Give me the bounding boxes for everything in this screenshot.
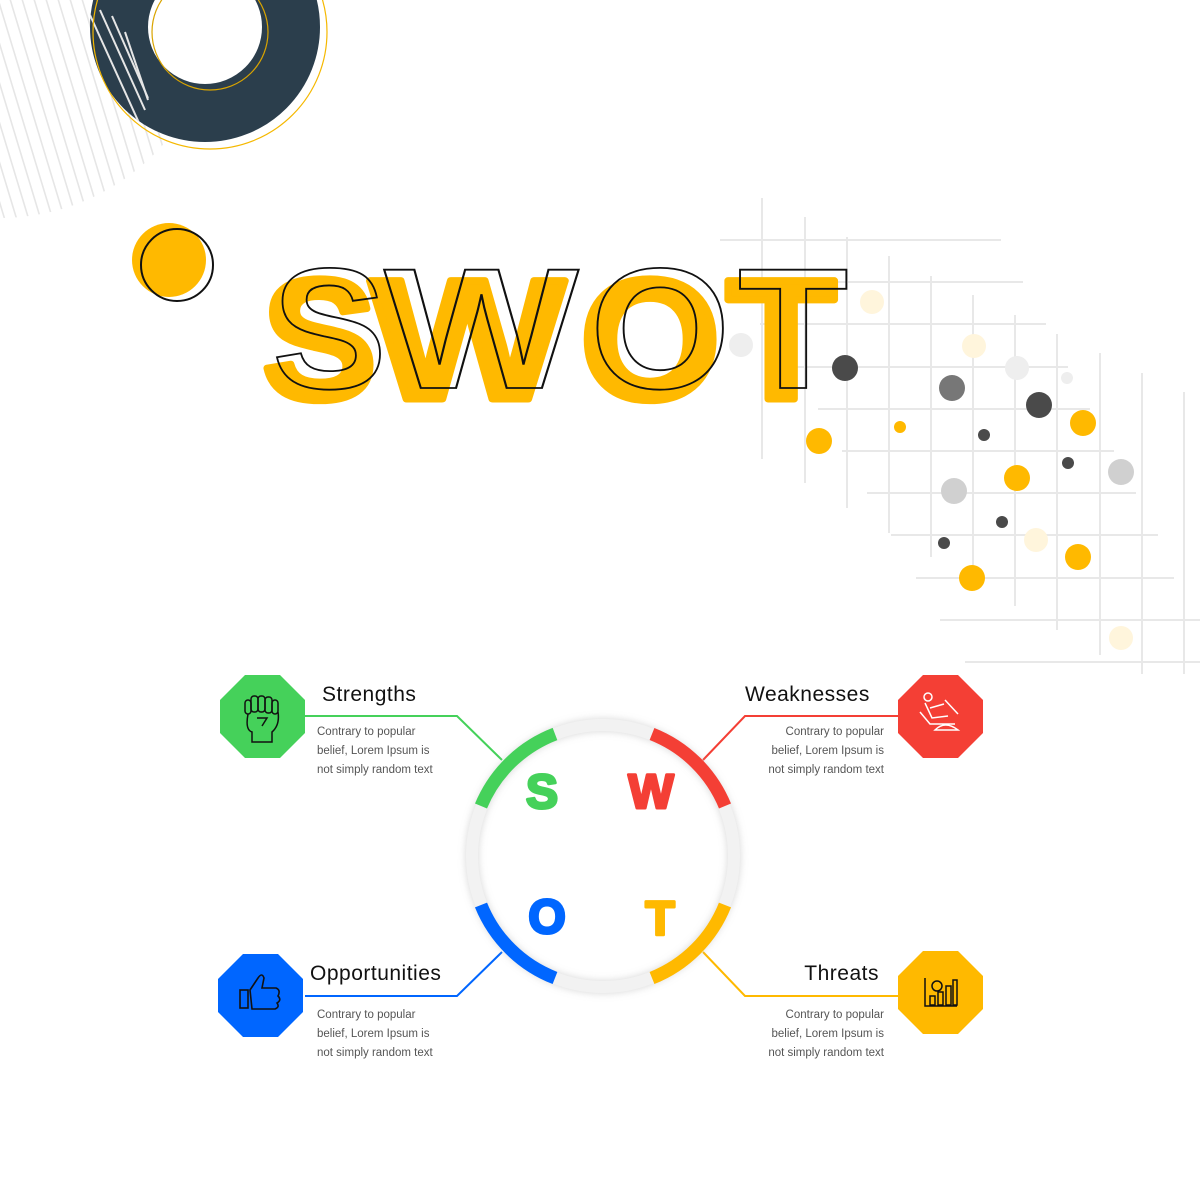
dots decoration bbox=[729, 290, 1134, 650]
center circle: T bbox=[645, 893, 675, 946]
title SWOT: S bbox=[272, 233, 387, 425]
decoration: yellow dot bbox=[132, 223, 213, 301]
center circle: O bbox=[528, 891, 566, 944]
icon: opportunities thumbs up bbox=[218, 954, 303, 1037]
center circle: W bbox=[628, 766, 674, 819]
title SWOT: T bbox=[738, 233, 848, 425]
text: threats body bbox=[768, 1009, 884, 1059]
center circle: S bbox=[526, 766, 558, 819]
heading: Strengths: Strengths bbox=[322, 683, 416, 706]
connector lines bbox=[305, 716, 898, 996]
text: strengths body bbox=[317, 726, 433, 776]
text: threats body: not simply random text bbox=[768, 1047, 884, 1059]
title SWOT: T bbox=[726, 244, 836, 436]
text: weaknesses body: belief, Lorem Ipsum is bbox=[772, 745, 884, 757]
text: weaknesses body: Contrary to popular bbox=[786, 726, 884, 738]
text: weaknesses body bbox=[768, 726, 884, 776]
text: threats body: belief, Lorem Ipsum is bbox=[772, 1028, 884, 1040]
title SWOT: W bbox=[384, 233, 580, 425]
text: strengths body: belief, Lorem Ipsum is bbox=[317, 745, 430, 757]
title SWOT: O bbox=[580, 244, 720, 436]
icon: strengths fist bbox=[220, 675, 305, 758]
icon: threats chart bbox=[898, 951, 983, 1034]
text: opportunities body: belief, Lorem Ipsum is bbox=[317, 1028, 430, 1040]
text: strengths body: not simply random text bbox=[317, 764, 433, 776]
title SWOT: O bbox=[590, 233, 730, 425]
title SWOT bbox=[262, 233, 848, 436]
text: strengths body: Contrary to popular bbox=[317, 726, 415, 738]
text: threats body: Contrary to popular bbox=[786, 1009, 884, 1021]
decoration: gray stripes bbox=[0, 0, 163, 218]
title SWOT: W bbox=[370, 244, 566, 436]
heading: Threats: Threats bbox=[804, 962, 879, 985]
grid decoration bbox=[720, 198, 1200, 674]
text: opportunities body: Contrary to popular bbox=[317, 1009, 415, 1021]
text: opportunities body: not simply random text bbox=[317, 1047, 433, 1059]
heading: Weaknesses: Weaknesses bbox=[745, 683, 870, 706]
text: opportunities body bbox=[317, 1009, 433, 1059]
title SWOT: S bbox=[262, 244, 377, 436]
icon: weaknesses bbox=[898, 675, 983, 758]
text: weaknesses body: not simply random text bbox=[768, 764, 884, 776]
decoration: dark donut bbox=[90, 0, 327, 149]
heading: Opportunities: Opportunities bbox=[310, 962, 441, 985]
center circle bbox=[472, 725, 734, 987]
